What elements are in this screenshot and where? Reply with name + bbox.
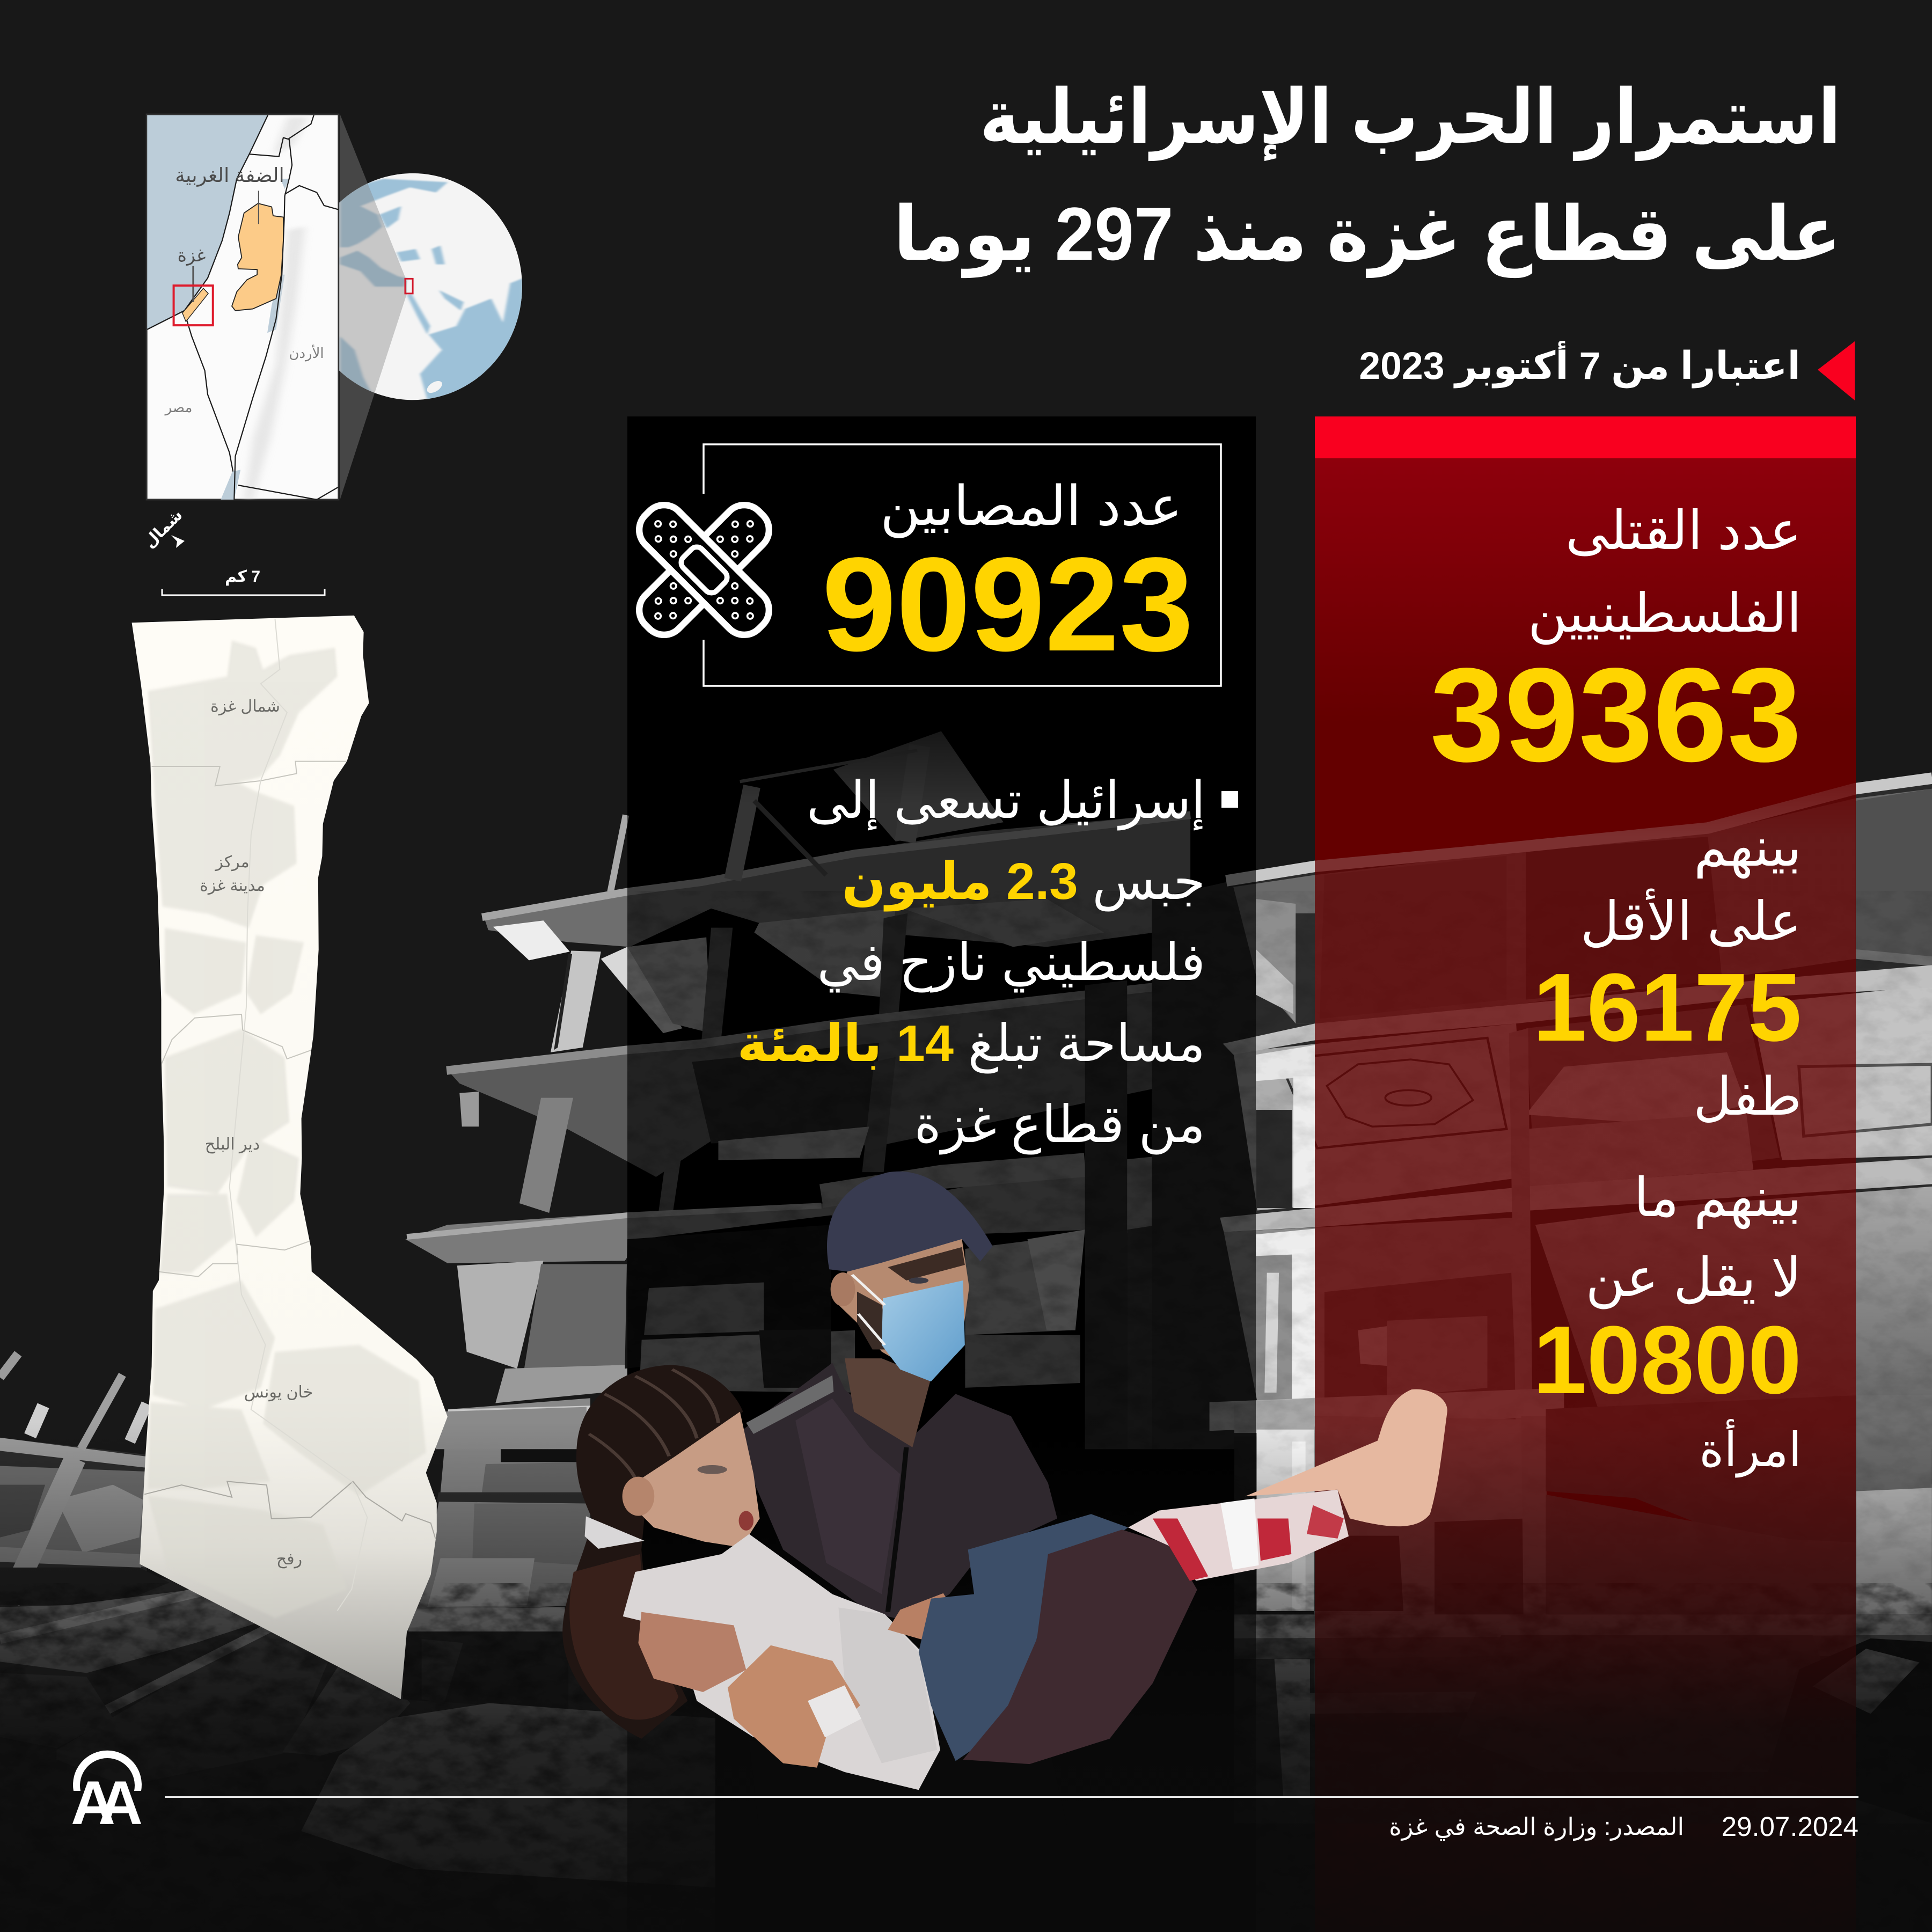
date: 29.07.2024 xyxy=(1722,1811,1858,1842)
text block: displacement: فلسطيني نازح في xyxy=(817,934,1205,991)
surgical mask xyxy=(882,1280,965,1381)
title: استمرار الحرب الإسرائيلية xyxy=(979,75,1841,159)
panel overlay: black column tint xyxy=(627,416,1256,1932)
text block: displacement: إسرائيل تسعى إلى xyxy=(807,772,1205,829)
building upper floors, left xyxy=(405,731,1190,1449)
map labels: Gaza governorates xyxy=(200,698,313,1569)
borders xyxy=(147,115,339,500)
title: على قطاع غزة منذ 297 يوما xyxy=(893,192,1841,276)
text block: displacement: جبس 2.3 مليون xyxy=(842,853,1205,910)
man's legs xyxy=(749,1741,1066,1825)
inset labels: مصر xyxy=(164,399,192,416)
heading: injured: عدد المصابين xyxy=(880,475,1182,537)
building right side floors xyxy=(1152,777,1932,1449)
man's neck xyxy=(845,1358,931,1447)
red locator box xyxy=(174,286,213,325)
north arrow: شمال xyxy=(141,506,186,552)
West Bank xyxy=(232,203,283,311)
map labels: Gaza governorates: مدينة غزة xyxy=(200,877,265,895)
date pointer triangle xyxy=(1818,341,1855,400)
girl's face xyxy=(623,1412,760,1547)
map labels: Gaza governorates: شمال غزة xyxy=(210,698,280,715)
terrain shading xyxy=(244,117,308,500)
number: injured: 90923 xyxy=(822,530,1194,679)
text: among them no fewer than: لا يقل عن xyxy=(1585,1248,1802,1308)
number: total killed: 39363 xyxy=(1430,640,1802,789)
globe with Gaza locator xyxy=(303,114,523,500)
locator red box xyxy=(405,279,413,294)
text: among them at least xyxy=(1580,817,1802,952)
inset map: Palestine xyxy=(147,114,339,500)
background photo: ruined building and rubble xyxy=(0,731,1932,1932)
map labels: Gaza governorates: رفح xyxy=(276,1550,302,1569)
texture on rubble and building xyxy=(0,1583,1932,1932)
number: women killed: 10800 xyxy=(1533,1306,1802,1414)
text: among them at least: على الأقل xyxy=(1580,891,1802,952)
text block: displacement: من قطاع غزة xyxy=(914,1096,1205,1153)
leader lines xyxy=(258,191,259,224)
panel: red header bar xyxy=(1315,416,1856,458)
inset labels xyxy=(164,164,324,416)
map: Gaza strip xyxy=(132,616,448,1699)
text: among them no fewer than: بينهم ما xyxy=(1634,1168,1802,1228)
heading: Palestinians killed xyxy=(1528,501,1802,645)
girl's jeans xyxy=(919,1514,1128,1761)
girl's foot and leg xyxy=(1245,1389,1447,1526)
scale bar: 7 كم xyxy=(225,568,260,586)
governorate borders xyxy=(144,619,436,1611)
heading: Palestinians killed: عدد القتلى xyxy=(1565,501,1802,561)
man's hand xyxy=(638,1612,746,1692)
footer rule xyxy=(165,1796,1858,1798)
text: among them at least: بينهم xyxy=(1694,817,1802,877)
source line: المصدر: وزارة الصحة في غزة xyxy=(1389,1813,1684,1840)
girl's shirt xyxy=(623,1534,940,1790)
man's face xyxy=(839,1238,969,1381)
logo: Anadolu Agency xyxy=(71,1751,142,1838)
scale bar xyxy=(162,568,325,595)
text block: displacement xyxy=(737,760,1205,1165)
logo: Anadolu Agency: AA xyxy=(71,1769,142,1838)
map labels: Gaza governorates: دير البلح xyxy=(205,1136,260,1154)
text block: displacement: مساحة تبلغ 14 بالمئة xyxy=(737,1015,1205,1072)
building bottom right floors xyxy=(1234,1395,1932,1824)
inset land and sea xyxy=(147,114,339,500)
cap xyxy=(827,1172,993,1271)
map labels: Gaza governorates: خان يونس xyxy=(244,1384,313,1401)
panel: deaths count xyxy=(1430,501,1802,1478)
panel overlay: red column tint xyxy=(1315,724,1856,1932)
photo: man carrying the injured girl xyxy=(562,1172,1447,1825)
rubble under the girl and building bottom xyxy=(301,1398,715,1887)
strip outline xyxy=(132,616,448,1699)
inset labels: الأردن xyxy=(289,344,324,361)
man's jacket xyxy=(743,1363,1057,1621)
globe land xyxy=(303,173,522,400)
urban areas xyxy=(148,641,426,1618)
blood stained skirt xyxy=(963,1529,1197,1764)
inset labels: غزة xyxy=(178,245,206,266)
hair tie xyxy=(585,1516,645,1549)
girl's arm xyxy=(728,1645,860,1768)
heading: Palestinians killed: الفلسطينيين xyxy=(1528,583,1802,643)
title xyxy=(893,75,1841,278)
map labels: Gaza governorates: مركز xyxy=(214,853,250,871)
text: among them no fewer than xyxy=(1585,1158,1802,1318)
text: woman: امرأة xyxy=(1699,1423,1802,1476)
subtitle: date range: اعتبارا من 7 أكتوبر 2023 xyxy=(1359,345,1801,387)
number: children killed: 16175 xyxy=(1533,954,1802,1062)
icon: crossed bandages xyxy=(631,496,778,643)
bullet square xyxy=(1221,791,1238,808)
girl's hair xyxy=(562,1365,743,1739)
bottom vignette xyxy=(0,1422,1932,1932)
locator cone xyxy=(340,114,407,500)
text: child: طفل xyxy=(1693,1067,1802,1126)
Gaza xyxy=(182,288,208,321)
panel base: injured black column xyxy=(627,416,1256,1932)
frame around injured count xyxy=(704,444,1221,686)
rubble left side xyxy=(0,1353,715,1932)
inset labels: الضفة الغربية xyxy=(175,164,284,187)
globe seas xyxy=(340,179,523,400)
leg bandage xyxy=(1128,1490,1349,1581)
panel base: deaths red column xyxy=(1315,458,1856,1932)
